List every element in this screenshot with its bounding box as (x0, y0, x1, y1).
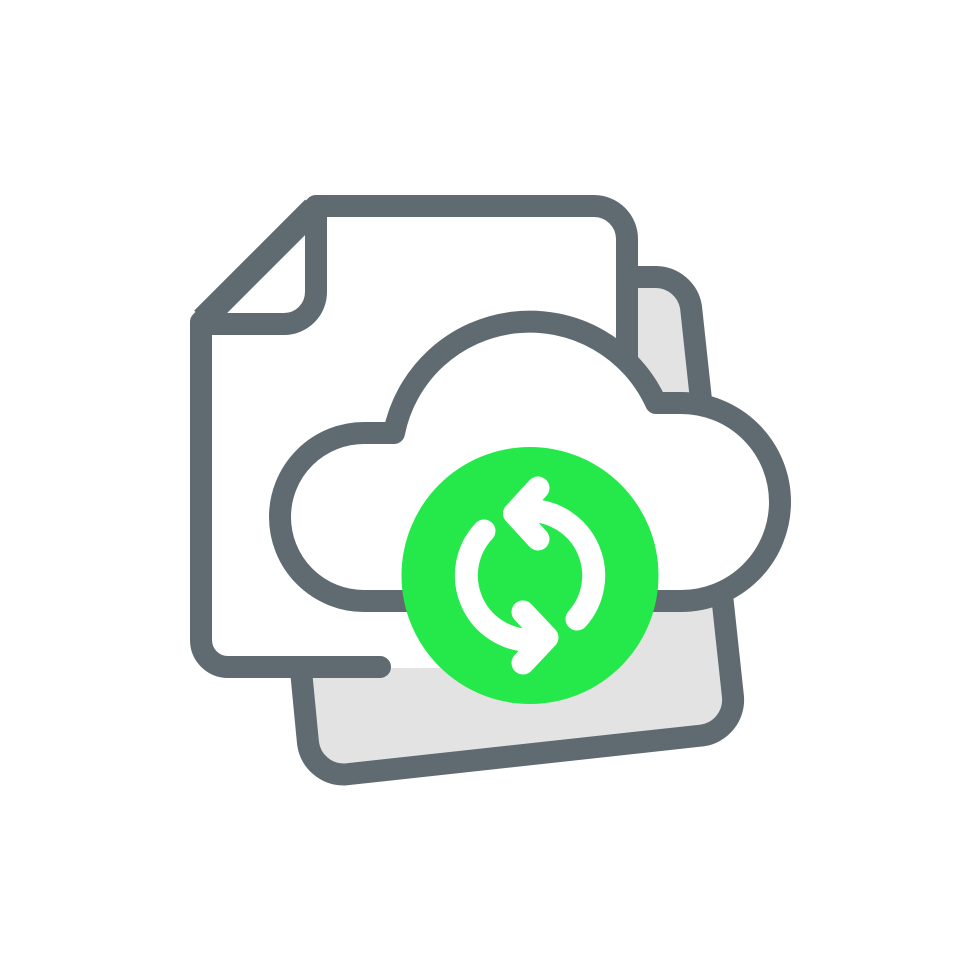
icon: green sync badge (402, 447, 658, 704)
icon: lower sync arrow (466, 531, 547, 663)
icon: cloud (280, 322, 780, 601)
icon: front document sheet (201, 206, 627, 668)
icon: back document sheet (300, 277, 733, 775)
icon: upper sync arrow (514, 488, 594, 619)
